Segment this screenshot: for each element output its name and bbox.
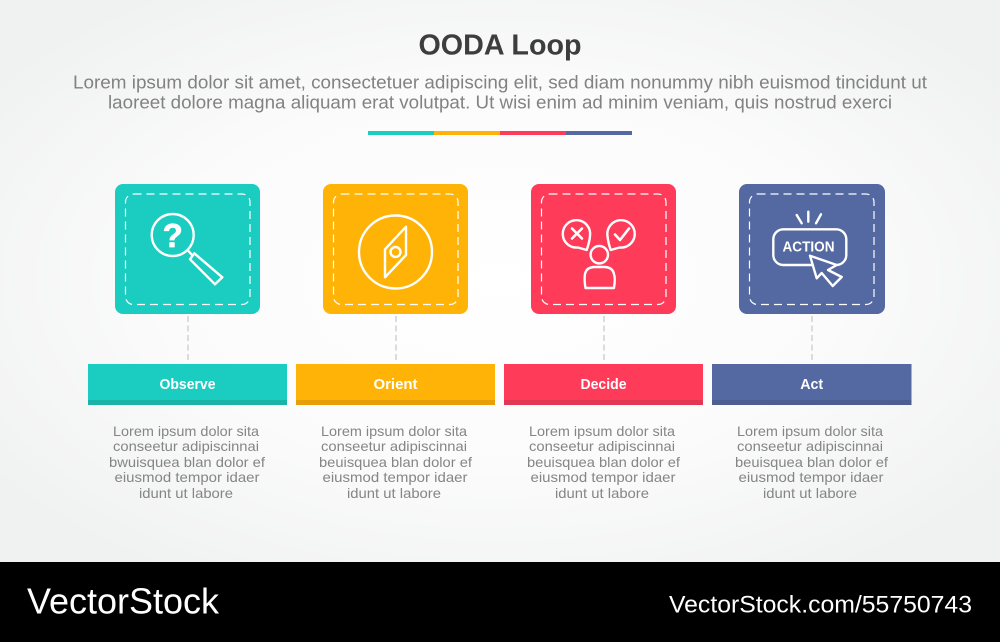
- observe icon card: [115, 184, 260, 314]
- act description: beuisquea blan dolor ef: [735, 454, 888, 470]
- act icon card: [739, 184, 885, 314]
- subtitle text: Lorem ipsum dolor sit amet, consectetuer adipiscing elit, sed diam nonummy nibh euismod tincidunt ut: [73, 72, 927, 92]
- watermark footer: VectorStock: [27, 580, 220, 622]
- orient description: eiusmod tempor idaer: [322, 469, 468, 485]
- act label bar: [712, 364, 912, 405]
- orient description: beuisquea blan dolor ef: [319, 454, 472, 470]
- observe description: idunt ut labore: [139, 485, 233, 501]
- decide description: [527, 423, 680, 501]
- act description: idunt ut labore: [763, 485, 857, 501]
- watermark footer: [0, 562, 1000, 642]
- orient icon card: [323, 184, 468, 314]
- act description: eiusmod tempor idaer: [738, 469, 884, 485]
- subtitle text: [73, 72, 927, 112]
- act description: Lorem ipsum dolor sita: [737, 423, 883, 439]
- decide description: idunt ut labore: [555, 485, 649, 501]
- observe description: [109, 423, 265, 501]
- act connector: [811, 316, 813, 362]
- panel: decide: [504, 184, 703, 501]
- observe description: bwuisquea blan dolor ef: [109, 454, 265, 470]
- icon: magnifier with question mark: [152, 214, 222, 284]
- panel: orient: [296, 184, 495, 501]
- orient description: conseetur adipiscinnai: [321, 438, 467, 454]
- orient label bar: [296, 364, 495, 405]
- act label bar: Act: [800, 377, 823, 393]
- observe description: conseetur adipiscinnai: [113, 438, 259, 454]
- decide description: conseetur adipiscinnai: [529, 438, 675, 454]
- icon: person weighing yes or no: [563, 220, 635, 288]
- four-colour title divider: [368, 131, 632, 135]
- icon: action button with cursor: ACTION: [782, 240, 834, 256]
- panel: act: [712, 184, 912, 501]
- icon: magnifier with question mark: ?: [163, 217, 183, 254]
- decide description: beuisquea blan dolor ef: [527, 454, 680, 470]
- decide icon card: [531, 184, 676, 314]
- decide description: Lorem ipsum dolor sita: [529, 423, 675, 439]
- panel: observe: [88, 184, 287, 501]
- act description: [735, 423, 888, 501]
- decide connector: [603, 316, 605, 362]
- orient label bar: Orient: [374, 377, 418, 393]
- orient connector: [395, 316, 397, 362]
- orient description: idunt ut labore: [347, 485, 441, 501]
- watermark footer: VectorStock.com/55750743: [669, 592, 972, 618]
- decide label bar: [504, 364, 703, 405]
- observe label bar: [88, 364, 287, 405]
- act description: conseetur adipiscinnai: [737, 438, 883, 454]
- observe description: eiusmod tempor idaer: [114, 469, 260, 485]
- observe label bar: Observe: [160, 377, 216, 393]
- orient description: [319, 423, 472, 501]
- decide label bar: Decide: [580, 377, 626, 393]
- subtitle text: laoreet dolore magna aliquam erat volutpat. Ut wisi enim ad minim veniam, quis nostrud exerci: [108, 92, 892, 112]
- observe description: Lorem ipsum dolor sita: [113, 423, 259, 439]
- orient description: Lorem ipsum dolor sita: [321, 423, 467, 439]
- observe connector: [187, 316, 189, 362]
- decide description: eiusmod tempor idaer: [530, 469, 676, 485]
- icon: compass: [359, 216, 432, 288]
- icon: action button with cursor: [773, 212, 846, 286]
- title: OODA Loop: [418, 30, 582, 62]
